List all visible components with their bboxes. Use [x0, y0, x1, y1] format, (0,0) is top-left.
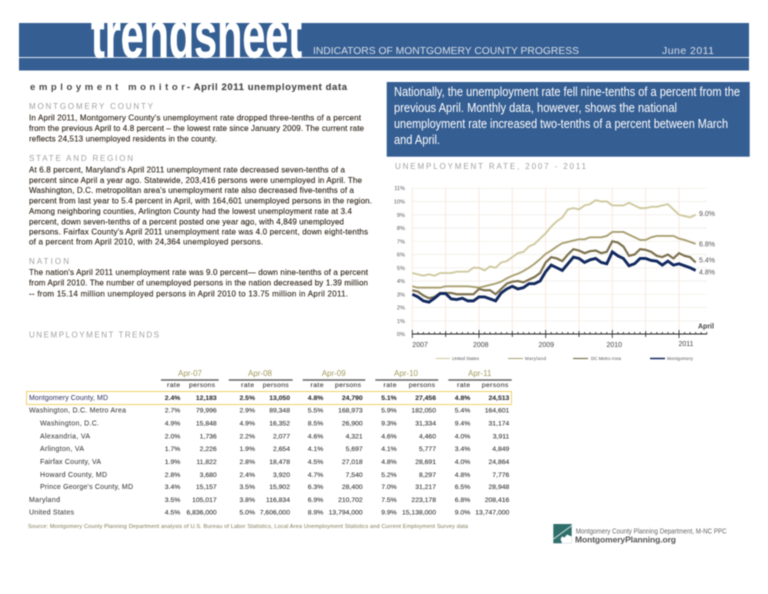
- highlight row: Montgomery County: 2.5%: [240, 395, 255, 402]
- row: Washington DC: [40, 421, 510, 428]
- highlight row: Montgomery County: 4.8%: [308, 395, 323, 402]
- row: Washington DC: 9.4%: [455, 421, 470, 428]
- row: Prince George's: 6.3%: [308, 484, 323, 491]
- row: Fairfax: 28,691: [415, 459, 436, 466]
- row: Howard: 3,920: [273, 472, 290, 479]
- text block: State and Region: persons. Fairfax County's April 2011 unemployment rate was 4.0 percent, down eight-tenths: [29, 227, 368, 236]
- text block: Nation: from April 2010. The number of unemployed persons in the nation decreased by 1.39 million: [29, 278, 368, 288]
- row: Prince George's: 28,948: [489, 484, 510, 491]
- column headers: rate: [457, 382, 470, 389]
- legend: United States: [452, 356, 480, 361]
- row: United States: 9.0%: [455, 509, 470, 516]
- footer logo and credit: MontgomeryPlanning.org: [575, 534, 676, 544]
- series: Maryland: [412, 232, 696, 288]
- column headers: Apr-08: [248, 369, 273, 378]
- highlight row: Montgomery County: Montgomery County, MD: [29, 395, 108, 402]
- y axis labels: 11%: [394, 186, 405, 192]
- end labels: [699, 211, 715, 277]
- row: United States: 5.0%: [240, 509, 255, 516]
- text block: State and Region: At 6.8 percent, Maryland's April 2011 unemployment rate decreased seven-tenths of a: [29, 166, 346, 174]
- column headers: rate: [167, 382, 180, 389]
- row: Arlington: Arlington, VA: [40, 446, 84, 453]
- row: Maryland: 116,834: [266, 497, 290, 504]
- row: United States: 15,138,000: [402, 509, 436, 516]
- row: United States: 13,747,000: [475, 509, 510, 516]
- row: Washington metro: 2.9%: [240, 407, 255, 414]
- title: trendsheet: [91, 0, 302, 72]
- row: Alexandria: 4,460: [419, 434, 436, 441]
- row: Washington DC: 16,352: [269, 421, 290, 428]
- y axis labels: 8%: [397, 226, 405, 232]
- row: Arlington: [40, 446, 510, 453]
- axis: [412, 333, 707, 335]
- table: unemployment trends: [26, 369, 512, 516]
- row: Fairfax: 27,018: [342, 459, 363, 466]
- row: United States: 6,836,000: [186, 509, 217, 516]
- highlight row: Montgomery County: 24,513: [489, 395, 510, 402]
- row: Alexandria: 4.6%: [308, 434, 323, 441]
- row: Howard: 4.7%: [308, 472, 323, 479]
- row: Howard: Howard County, MD: [40, 472, 107, 479]
- text block: State and Region: Washington, D.C. metropolitan area's unemployment rate also decreased five-tenths of a: [29, 186, 355, 195]
- row: Howard: 2.4%: [240, 472, 255, 479]
- y axis labels: [394, 186, 405, 338]
- issue date: June 2011: [662, 45, 714, 57]
- column headers: rate: [241, 382, 254, 389]
- row: Arlington: 4,849: [492, 446, 510, 453]
- y axis labels: 7%: [397, 239, 405, 245]
- row: Arlington: 1.7%: [165, 446, 180, 453]
- text block: Nation: NATION: [29, 257, 69, 266]
- row: Prince George's: Prince George's County, MD: [40, 484, 133, 491]
- subtitle: INDICATORS OF MONTGOMERY COUNTY PROGRESS: [313, 45, 579, 57]
- row: Alexandria: 2.2%: [240, 434, 255, 441]
- row: Alexandria: 1,736: [200, 434, 217, 441]
- row: Washington metro: [29, 407, 510, 414]
- text block: State and Region: percent, down seven-tenths of a percent posted one year ago, with 4,849 unemployed: [29, 217, 344, 226]
- row: Howard: 4.8%: [455, 472, 470, 479]
- row: Howard: 7,776: [492, 472, 510, 479]
- end labels: 4.8%: [699, 270, 715, 277]
- row: United States: 8.9%: [308, 509, 323, 516]
- section heading: [30, 82, 348, 93]
- row: Howard: 5.2%: [381, 472, 397, 479]
- y axis labels: 4%: [397, 279, 405, 285]
- row: Prince George's: 7.0%: [381, 484, 397, 491]
- row: Alexandria: 2.0%: [165, 434, 180, 441]
- row: Alexandria: Alexandria, VA: [40, 434, 90, 441]
- series: DC Metro Area: [412, 241, 696, 298]
- row: Howard: 8,297: [419, 472, 436, 479]
- row: Arlington: 4.1%: [308, 446, 323, 453]
- text block: Nation: [29, 257, 369, 298]
- row: Maryland: 210,702: [338, 497, 363, 504]
- series: Montgomery: [412, 252, 696, 302]
- row: Prince George's: [40, 484, 510, 491]
- end labels: 5.4%: [699, 258, 715, 265]
- legend: Maryland: [525, 356, 546, 361]
- row: Alexandria: 4,321: [346, 434, 363, 441]
- text block: State and Region: [29, 154, 372, 246]
- highlight row: Montgomery County: 24,790: [342, 395, 363, 402]
- row: Fairfax: Fairfax County, VA: [40, 459, 101, 466]
- x axis labels: 2011: [678, 341, 694, 348]
- x axis labels: [412, 341, 694, 349]
- column headers: Apr-07: [178, 369, 203, 378]
- row: Maryland: 3.8%: [240, 497, 255, 504]
- row: Arlington: 2,654: [273, 446, 290, 453]
- row: Howard: [40, 472, 510, 479]
- row: Washington metro: 5.4%: [455, 407, 470, 414]
- row: Washington metro: 2.7%: [165, 407, 180, 414]
- table heading: UNEMPLOYMENT TRENDS: [29, 331, 159, 340]
- row: Fairfax: 4.0%: [455, 459, 470, 466]
- legend: Montgomery: [667, 356, 694, 361]
- text block: Nation: -- from 15.14 million unemployed persons in April 2010 to 13.75 million in April 2011.: [29, 290, 348, 298]
- row: Alexandria: 4.0%: [455, 434, 470, 441]
- row: Alexandria: 3,911: [493, 434, 510, 441]
- column headers: Apr-10: [394, 369, 419, 378]
- row: Alexandria: 4.6%: [381, 434, 397, 441]
- column headers: persons: [189, 382, 216, 389]
- row: Washington DC: Washington, D.C.: [40, 421, 99, 428]
- row: Washington DC: 26,900: [342, 421, 363, 428]
- row: Fairfax: 2.8%: [240, 459, 255, 466]
- row: Maryland: 6.9%: [308, 497, 323, 504]
- row: Alexandria: [40, 434, 510, 441]
- row: Prince George's: 3.4%: [165, 484, 180, 491]
- highlight row: Montgomery County: 13,050: [269, 395, 290, 402]
- row: Washington DC: 31,334: [415, 421, 436, 428]
- row: Arlington: 5,777: [419, 446, 436, 453]
- row: Maryland: 208,416: [485, 497, 510, 504]
- row: Howard: 2.8%: [165, 472, 180, 479]
- column headers: persons: [409, 382, 436, 389]
- row: Washington DC: 31,174: [489, 421, 510, 428]
- section heading: - April 2011 unemployment data: [187, 82, 348, 93]
- row: Maryland: 7.5%: [381, 497, 397, 504]
- row: Maryland: 223,178: [411, 497, 436, 504]
- row: Washington metro: 5.5%: [308, 407, 323, 414]
- highlight row: Montgomery County: 5.1%: [381, 395, 397, 402]
- row: Washington metro: 164,601: [485, 407, 510, 414]
- highlight row: Montgomery County: 12,183: [196, 395, 217, 402]
- series: United States: [412, 200, 696, 276]
- row: United States: 7,606,000: [260, 509, 290, 516]
- row: Fairfax: [40, 459, 510, 466]
- end labels: 6.8%: [699, 242, 715, 249]
- row: Prince George's: 31,217: [415, 484, 436, 491]
- column headers: persons: [335, 382, 362, 389]
- text block: Montgomery County: reflects 24,513 unemployed residents in the county.: [29, 134, 217, 144]
- row: Arlington: 3.4%: [455, 446, 470, 453]
- text block: State and Region: of a percent from April 2010, with 24,364 unemployed persons.: [29, 237, 263, 246]
- text block: State and Region: STATE AND REGION: [29, 154, 133, 163]
- x axis labels: 2008: [473, 342, 489, 349]
- row: Prince George's: 6.5%: [455, 484, 470, 491]
- column headers: Apr-09: [322, 369, 346, 378]
- row: Prince George's: 3.5%: [240, 484, 255, 491]
- legend: DC Metro Area: [591, 356, 621, 361]
- header banner: [19, 0, 749, 72]
- icon: planning department logo: [553, 524, 572, 543]
- footer logo and credit: Montgomery County Planning Department, M-NC PPC: [576, 528, 727, 535]
- row: Washington DC: 8.5%: [308, 421, 323, 428]
- row: Arlington: 2,226: [200, 446, 217, 453]
- column headers: rate: [384, 382, 397, 389]
- text block: State and Region: Among neighboring counties, Arlington County had the lowest unemployment rate at 3.4: [29, 207, 353, 216]
- row: Prince George's: 15,157: [196, 484, 217, 491]
- row: Washington metro: 5.9%: [381, 407, 397, 414]
- row: Howard: 3,680: [200, 472, 217, 479]
- source note: Source: Montgomery County Planning Department analysis of U.S. Bureau of Labor Statistics, Local Area Unemployment Statistics and Current Employment Survey data: [28, 524, 469, 530]
- y axis labels: 10%: [394, 200, 405, 206]
- row: Arlington: 1.9%: [240, 446, 255, 453]
- text block: Montgomery County: In April 2011, Montgomery County's unemployment rate dropped three-tenths of a percent: [29, 114, 362, 122]
- row: Maryland: 3.5%: [165, 497, 180, 504]
- row: Maryland: 105,017: [192, 497, 217, 504]
- row: Arlington: 5,697: [346, 446, 363, 453]
- callout: national rate: previous April. Monthly data, however, shows the national: [394, 100, 677, 115]
- text block: State and Region: percent from last year to 5.4 percent in April, with 164,601 unemployed persons in the region.: [29, 196, 372, 206]
- y axis labels: 3%: [397, 292, 405, 298]
- row: Arlington: 4.1%: [381, 446, 397, 453]
- x axis labels: 2007: [412, 342, 428, 349]
- x axis labels: 2009: [538, 342, 554, 349]
- row: United States: United States: [29, 509, 74, 516]
- column headers: rate: [310, 382, 324, 389]
- row: Washington metro: 89,348: [269, 407, 290, 414]
- callout: national rate: [387, 82, 750, 157]
- row: Washington metro: Washington, D.C. Metro Area: [29, 407, 126, 414]
- chart heading: UNEMPLOYMENT RATE, 2007 - 2011: [395, 162, 587, 171]
- section heading: employment monitor: [30, 82, 185, 93]
- row: Fairfax: 1.9%: [165, 459, 180, 466]
- y axis labels: 1%: [397, 319, 405, 325]
- row: Washington metro: 168,973: [338, 407, 363, 414]
- y axis labels: 6%: [397, 252, 405, 258]
- footer logo and credit: [553, 524, 727, 544]
- row: Howard: 7,540: [346, 472, 363, 479]
- row: United States: 4.5%: [165, 509, 180, 516]
- y axis labels: 9%: [397, 213, 405, 219]
- callout: national rate: and April.: [394, 132, 440, 147]
- row: Fairfax: 24,864: [489, 459, 510, 466]
- legend: [436, 356, 694, 361]
- x axis labels: 2010: [606, 342, 622, 349]
- row: Maryland: [29, 497, 510, 504]
- y axis labels: 5%: [397, 266, 405, 272]
- row: Maryland: 6.8%: [455, 497, 470, 504]
- line chart: unemployment rate: [394, 186, 715, 361]
- column headers: persons: [482, 382, 509, 389]
- row: Washington DC: 9.3%: [381, 421, 397, 428]
- row: United States: 9.9%: [381, 509, 397, 516]
- y axis labels: 2%: [397, 306, 405, 312]
- highlight row: Montgomery County: 4.8%: [455, 395, 470, 402]
- row: Washington DC: 4.9%: [165, 421, 180, 428]
- text block: Nation: The nation's April 2011 unemployment rate was 9.0 percent— down nine-tenths of a percent: [29, 268, 369, 277]
- column headers: [161, 369, 512, 389]
- row: Fairfax: 4.5%: [308, 459, 323, 466]
- row: Washington DC: 15,848: [196, 421, 217, 428]
- row: Fairfax: 4.8%: [381, 459, 397, 466]
- April marker: April: [698, 324, 714, 331]
- row: Washington metro: 182,050: [411, 407, 436, 414]
- row: Alexandria: 2,077: [273, 434, 290, 441]
- row: Prince George's: 15,902: [269, 484, 290, 491]
- y axis labels: 0%: [397, 332, 405, 338]
- row: United States: 13,794,000: [329, 509, 363, 516]
- row: Washington DC: 4.9%: [240, 421, 255, 428]
- row: Washington metro: 79,996: [196, 407, 217, 414]
- highlight row: Montgomery County: [26, 392, 512, 404]
- row: United States: [29, 509, 510, 516]
- text block: Montgomery County: from the previous April to 4.8 percent – the lowest rate since January 2009. The current rate: [29, 124, 365, 133]
- row: Maryland: Maryland: [29, 497, 60, 504]
- row: Prince George's: 28,400: [342, 484, 363, 491]
- highlight row: Montgomery County: 27,456: [415, 395, 436, 402]
- row: Fairfax: 18,478: [269, 459, 290, 466]
- highlight row: Montgomery County: 2.4%: [165, 395, 180, 402]
- column headers: persons: [263, 382, 289, 389]
- column headers: Apr-11: [468, 369, 492, 378]
- end labels: 9.0%: [699, 211, 715, 218]
- text block: Montgomery County: MONTGOMERY COUNTY: [29, 102, 154, 111]
- text block: State and Region: percent since April a year ago. Statewide, 203,416 persons were unemployed in April. The: [29, 176, 363, 185]
- text block: Montgomery County: [29, 102, 365, 144]
- row: Fairfax: 11,822: [196, 459, 217, 466]
